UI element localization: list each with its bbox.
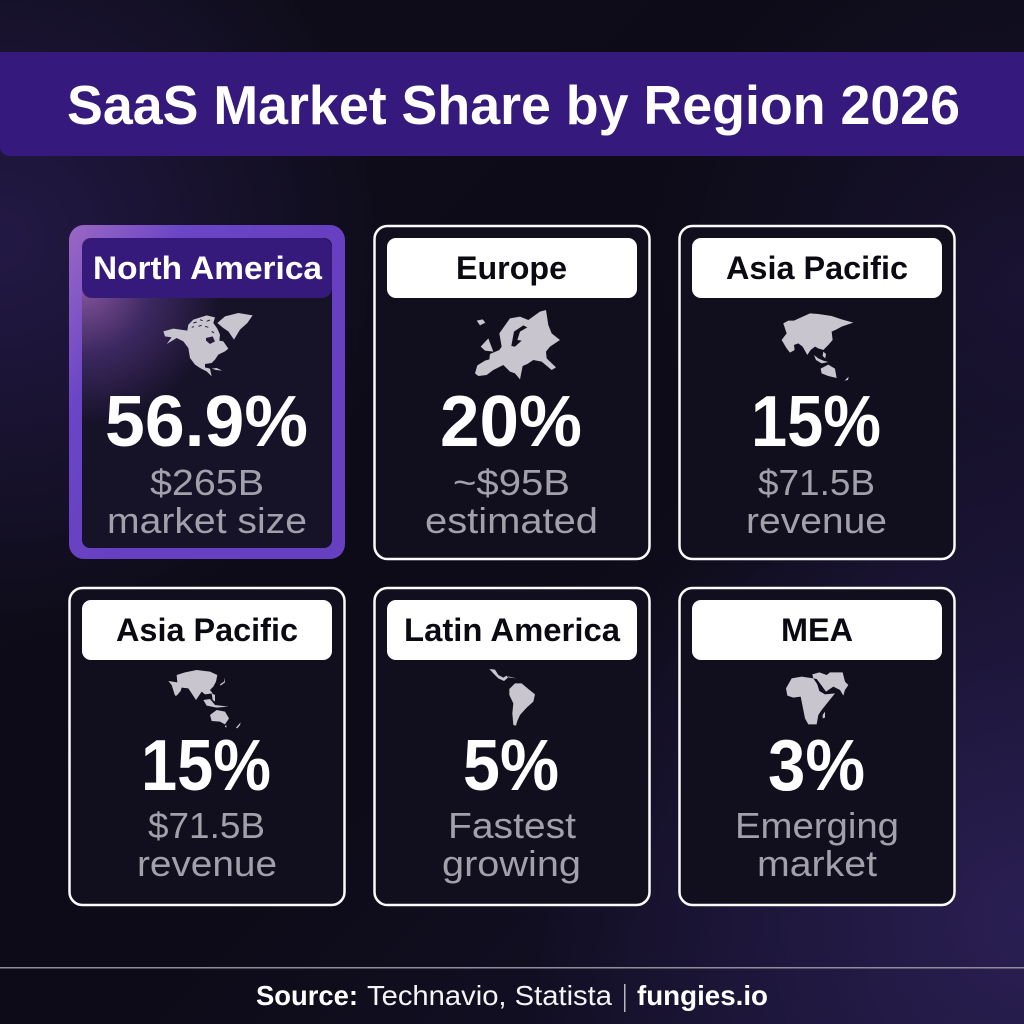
detail: Asia Pacific (second): revenue [137, 843, 277, 884]
market size: North America: $265B [150, 462, 264, 503]
value: North America: 56.9% [105, 382, 308, 462]
region header: MEA [692, 600, 942, 660]
region header: North America [82, 238, 332, 298]
value: Asia Pacific (second): 15% [141, 726, 271, 806]
icon: Asia Pacific map [782, 313, 853, 381]
icon: Latin America map [489, 669, 535, 726]
source line: fungies.io [637, 980, 768, 1011]
panel: Asia Pacific (second) [70, 588, 344, 905]
panel: North America [69, 225, 345, 559]
source line: Source: [256, 980, 358, 1011]
detail: Latin America: growing [442, 843, 581, 884]
title: SaaS Market Share by Region 2026 [67, 74, 960, 136]
market size: North America [107, 462, 307, 541]
detail: Asia Pacific (second) [137, 805, 277, 884]
panel: Asia Pacific [680, 226, 954, 559]
panel: Europe [374, 226, 650, 559]
detail: Asia Pacific [746, 462, 887, 541]
source line: Technavio, Statista [367, 980, 612, 1011]
region header: Latin America: Latin America [404, 612, 620, 648]
region header: MEA: MEA [781, 612, 853, 648]
detail: MEA [735, 805, 899, 884]
panel: MEA [680, 588, 954, 905]
panel: Latin America [374, 588, 650, 905]
detail: Latin America: Fastest [448, 805, 576, 846]
detail: Latin America [442, 805, 581, 884]
detail: Asia Pacific: $71.5B [758, 462, 875, 503]
region header: Latin America [387, 600, 637, 660]
source line [256, 980, 768, 1012]
region header: Asia Pacific (second): Asia Pacific [116, 612, 298, 648]
icon: Europe map [475, 310, 560, 379]
detail: MEA: market [757, 843, 877, 884]
detail: MEA: Emerging [735, 805, 899, 846]
market size: North America: market size [107, 500, 307, 541]
icon: North America map [163, 313, 253, 376]
detail: Asia Pacific: revenue [746, 500, 887, 541]
icon: Asia Pacific map (second) [168, 670, 241, 728]
region header: Europe [387, 238, 637, 298]
footer divider [0, 967, 1024, 968]
value: MEA: 3% [768, 726, 865, 806]
value: Europe: 20% [440, 382, 582, 462]
value: Latin America: 5% [463, 726, 559, 806]
region header: North America: North America [93, 250, 322, 286]
value: Asia Pacific: 15% [751, 382, 881, 462]
region header: Asia Pacific: Asia Pacific [726, 250, 908, 286]
detail: Asia Pacific (second): $71.5B [148, 805, 265, 846]
detail: Europe [425, 462, 598, 541]
icon: Africa and Middle East map [786, 672, 848, 724]
region header: Asia Pacific (second) [82, 600, 332, 660]
detail: Europe: ~$95B [453, 462, 570, 503]
region header: Asia Pacific [692, 238, 942, 298]
region header: Europe: Europe [456, 250, 567, 286]
title banner [0, 52, 1024, 156]
detail: Europe: estimated [425, 500, 598, 541]
